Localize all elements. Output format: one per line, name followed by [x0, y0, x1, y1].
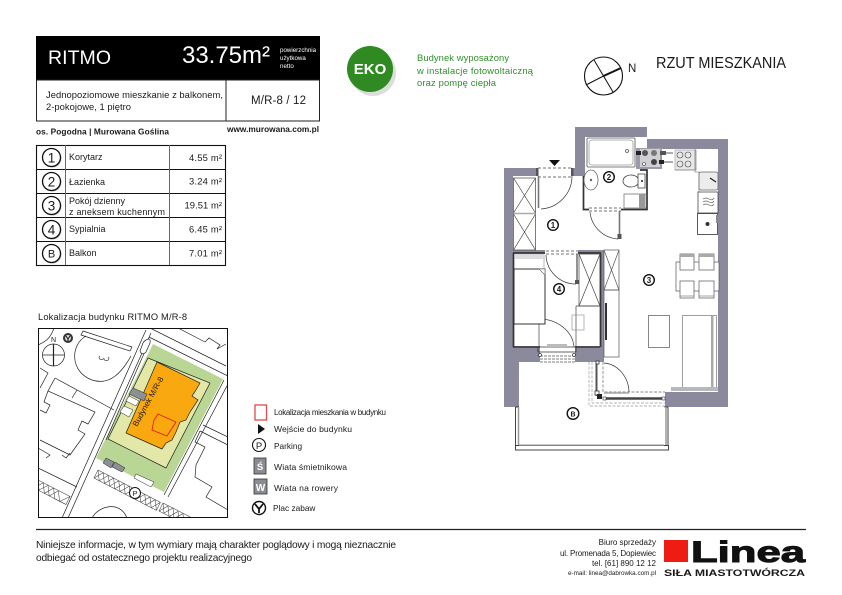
row: Łazienka: Łazienka: [69, 177, 105, 187]
door: bathroom: [589, 208, 622, 239]
building surroundings: [108, 358, 210, 468]
map heading: Lokalizacja budynku RITMO M/R-8: [38, 312, 187, 322]
eko badge: EKO: [354, 61, 387, 78]
room number 2: [604, 172, 614, 182]
sales office contact: [560, 538, 657, 577]
room number 4: [554, 284, 564, 294]
sales office contact: ul. Promenada 5, Dopiewiec: [560, 549, 656, 558]
disclaimer: odbiegać od ostatecznego projektu realizacyjnego: [36, 553, 252, 564]
row: Pokój dzienny: z aneksem kuchennym: [69, 207, 165, 217]
installation shaft: [636, 148, 673, 169]
coffee table: [648, 316, 670, 348]
legend: parking: [252, 438, 303, 452]
oven: [698, 214, 718, 234]
room number 4: 4: [557, 285, 562, 294]
room number 3: [644, 275, 654, 285]
icon: parking marker: [130, 488, 140, 498]
eko badge: [347, 46, 396, 96]
kitchen wardrobe unit: [604, 250, 619, 357]
icon: entrance arrow: [549, 160, 560, 166]
row: Pokój dzienny: 3: [48, 198, 55, 214]
brand logo: Linea: [691, 536, 805, 569]
apartment floor plan: [504, 127, 728, 450]
brand logo: SIŁA MIASTOTWÓRCZA: [664, 567, 806, 578]
room number 1: 1: [551, 221, 556, 230]
dining table and chairs: [676, 254, 719, 298]
row: Balkon: 7.01 m²: [189, 248, 222, 258]
row: Korytarz: [42, 148, 222, 168]
legend: waste shelter: [254, 458, 347, 474]
icon: north marker: [42, 337, 64, 366]
legend: bike shelter: [254, 479, 339, 494]
balcony railing: [516, 407, 668, 450]
room label B: B: [570, 412, 576, 418]
row: Łazienka: 2: [48, 174, 55, 190]
sales office contact: e-mail: linea@dabrowka.com.pl: [568, 570, 656, 577]
washbasin: [584, 170, 598, 190]
hatched parking: [39, 470, 191, 517]
toilet: [623, 174, 645, 188]
row: Sypialnia: 6.45 m²: [189, 224, 222, 234]
sales office contact: tel. [61] 890 12 12: [592, 559, 657, 568]
green lot: [96, 344, 223, 492]
room labels: [548, 172, 654, 419]
shelters: [103, 388, 147, 472]
row: Pokój dzienny: [42, 196, 222, 217]
kitchen cooktop: [675, 150, 696, 170]
brand logo: [664, 536, 806, 578]
bed: [514, 255, 545, 324]
sales office contact: Biuro sprzedaży: [599, 538, 656, 547]
walls: [504, 127, 728, 407]
room number 2: 2: [607, 173, 612, 182]
header panel: powierzchnia: [280, 47, 317, 54]
bathtub: [587, 138, 635, 167]
row: Pokój dzienny: 19.51 m²: [184, 200, 222, 210]
door: entrance: [536, 168, 574, 209]
playground sign: [99, 356, 109, 361]
icon: parking marker: P: [132, 489, 138, 498]
disclaimer: [36, 540, 396, 564]
website: www.murowana.com.pl: [226, 124, 319, 134]
row: Łazienka: [42, 172, 222, 192]
apartment location: [152, 414, 176, 436]
header panel: M/R-8 / 12: [251, 95, 306, 107]
footer divider: [36, 528, 806, 530]
balcony terrace door: [589, 361, 665, 406]
room number 1: [548, 220, 558, 230]
legend: waste shelter: Wiata śmietnikowa: [274, 462, 347, 472]
header panel: netto: [280, 63, 294, 70]
balcony door opening: [538, 344, 576, 362]
legend: apartment location: Lokalizacja mieszkania w budynku: [274, 408, 386, 417]
legend: parking: Parking: [274, 441, 303, 451]
legend: waste shelter: Ś: [257, 461, 263, 473]
row: Balkon: [42, 244, 222, 264]
location map: [34, 328, 228, 530]
eko text: [416, 52, 534, 88]
building footprint: [126, 362, 200, 449]
room area table: [36, 145, 226, 266]
room number 3: 3: [647, 276, 652, 285]
header panel: RITMO: [48, 47, 111, 69]
row: Sypialnia: [42, 220, 222, 240]
header panel: Jednopoziomowe mieszkanie z balkonem,: [46, 89, 223, 100]
bathroom partitions: [513, 170, 647, 347]
row: Balkon: Balkon: [69, 248, 97, 258]
plan heading: RZUT MIESZKANIA: [656, 55, 787, 72]
shower tray: [624, 194, 646, 208]
wardrobe: hall: [514, 178, 536, 250]
sofa: [671, 316, 718, 391]
row: Pokój dzienny: Pokój dzienny: [69, 196, 126, 206]
header panel: [36, 36, 320, 121]
kitchen sink: [699, 172, 718, 190]
legend: bike shelter: W: [256, 483, 266, 494]
icon: compass: [584, 57, 636, 95]
kitchen worktop: [695, 149, 699, 235]
wardrobe: bedroom: [539, 254, 600, 347]
eko text: oraz pompę ciepła: [417, 77, 497, 88]
roads and neighbouring buildings: [38, 328, 228, 518]
row: Korytarz: 4.55 m²: [189, 152, 222, 163]
legend: entrance: Wejście do budynku: [274, 424, 352, 434]
icon: north marker: N: [51, 337, 56, 344]
white shelter blocks: [120, 396, 154, 487]
header panel: 2-pokojowe, 1 piętro: [46, 101, 131, 112]
icon: compass: N: [628, 63, 636, 75]
row: Korytarz: Korytarz: [69, 152, 103, 162]
row: Balkon: B: [48, 248, 55, 260]
legend: playground: Plac zabaw: [273, 503, 316, 513]
row: Sypialnia: 4: [48, 222, 56, 238]
eko text: w instalacje fotowoltaiczną: [416, 65, 534, 76]
map legend: [252, 405, 386, 514]
room label B: [567, 408, 579, 419]
disclaimer: Niniejsze informacje, w tym wymiary mają charakter poglądowy i mogą nieznacznie: [36, 540, 396, 551]
eko text: Budynek wyposażony: [417, 52, 509, 63]
header panel: użytkowa: [280, 55, 306, 62]
row: Sypialnia: Sypialnia: [69, 224, 106, 234]
icon: playground: [63, 333, 73, 343]
door: bedroom: [546, 251, 579, 284]
legend: bike shelter: Wiata na rowery: [274, 483, 339, 493]
location line: os. Pogodna | Murowana Goślina: [36, 126, 169, 136]
row: Łazienka: 3.24 m²: [189, 176, 222, 186]
header panel: 33.75m²: [182, 42, 270, 69]
kitchen appliance: [698, 192, 718, 213]
building name: Budynek M/R-8: [131, 375, 166, 428]
legend: parking: P: [256, 441, 262, 452]
row: Korytarz: 1: [48, 150, 55, 166]
